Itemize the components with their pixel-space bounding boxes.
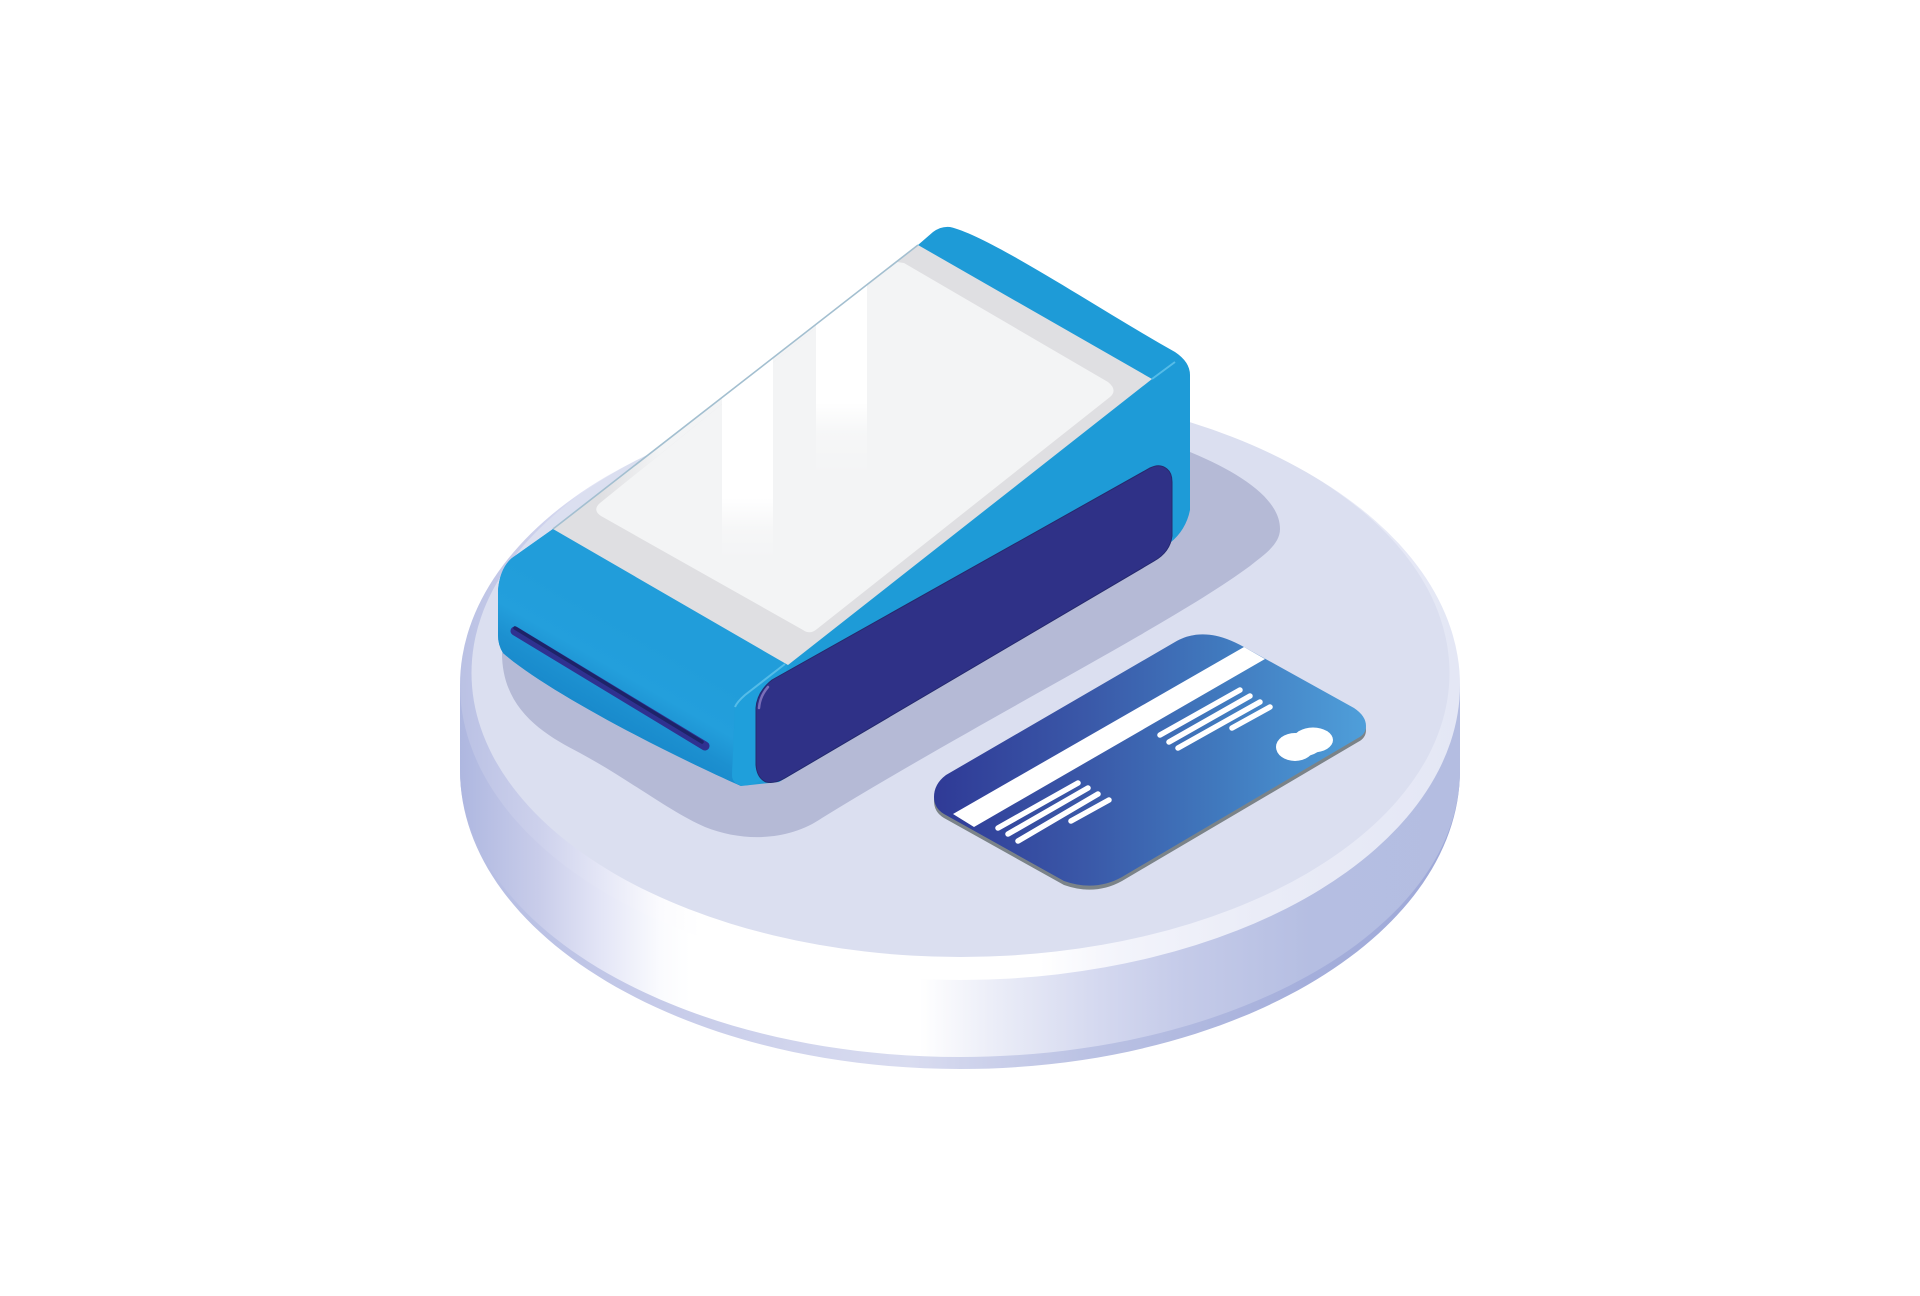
panel highlight (759, 687, 768, 708)
terminal bezel (553, 245, 1152, 665)
platform side wall (460, 685, 1460, 1057)
card slot inner shadow (515, 628, 702, 742)
screen edge line (553, 245, 918, 529)
platform bottom lip (460, 685, 1460, 1069)
terminal highlight edges (735, 362, 1175, 707)
magnetic stripe (953, 647, 1265, 827)
terminal navy panel (756, 466, 1172, 782)
card face (934, 634, 1366, 886)
platform top surface (472, 389, 1450, 957)
platform rim (460, 390, 1460, 980)
terminal corner strip (732, 663, 788, 785)
terminal screen (596, 262, 1114, 632)
card slot (515, 631, 705, 746)
credit card (934, 634, 1366, 890)
screen reflection right (816, 285, 867, 478)
screen reflection left (722, 358, 773, 560)
text lines upper (1160, 690, 1270, 748)
terminal front face (498, 529, 788, 786)
payment terminal (498, 227, 1190, 786)
device shadow (502, 450, 1280, 837)
card logo (1276, 728, 1333, 761)
card edge (934, 638, 1366, 890)
text lines lower (998, 783, 1109, 841)
screen bezel fade (590, 262, 897, 503)
platform: round base (460, 389, 1460, 1069)
terminal blue shell (498, 227, 1190, 786)
